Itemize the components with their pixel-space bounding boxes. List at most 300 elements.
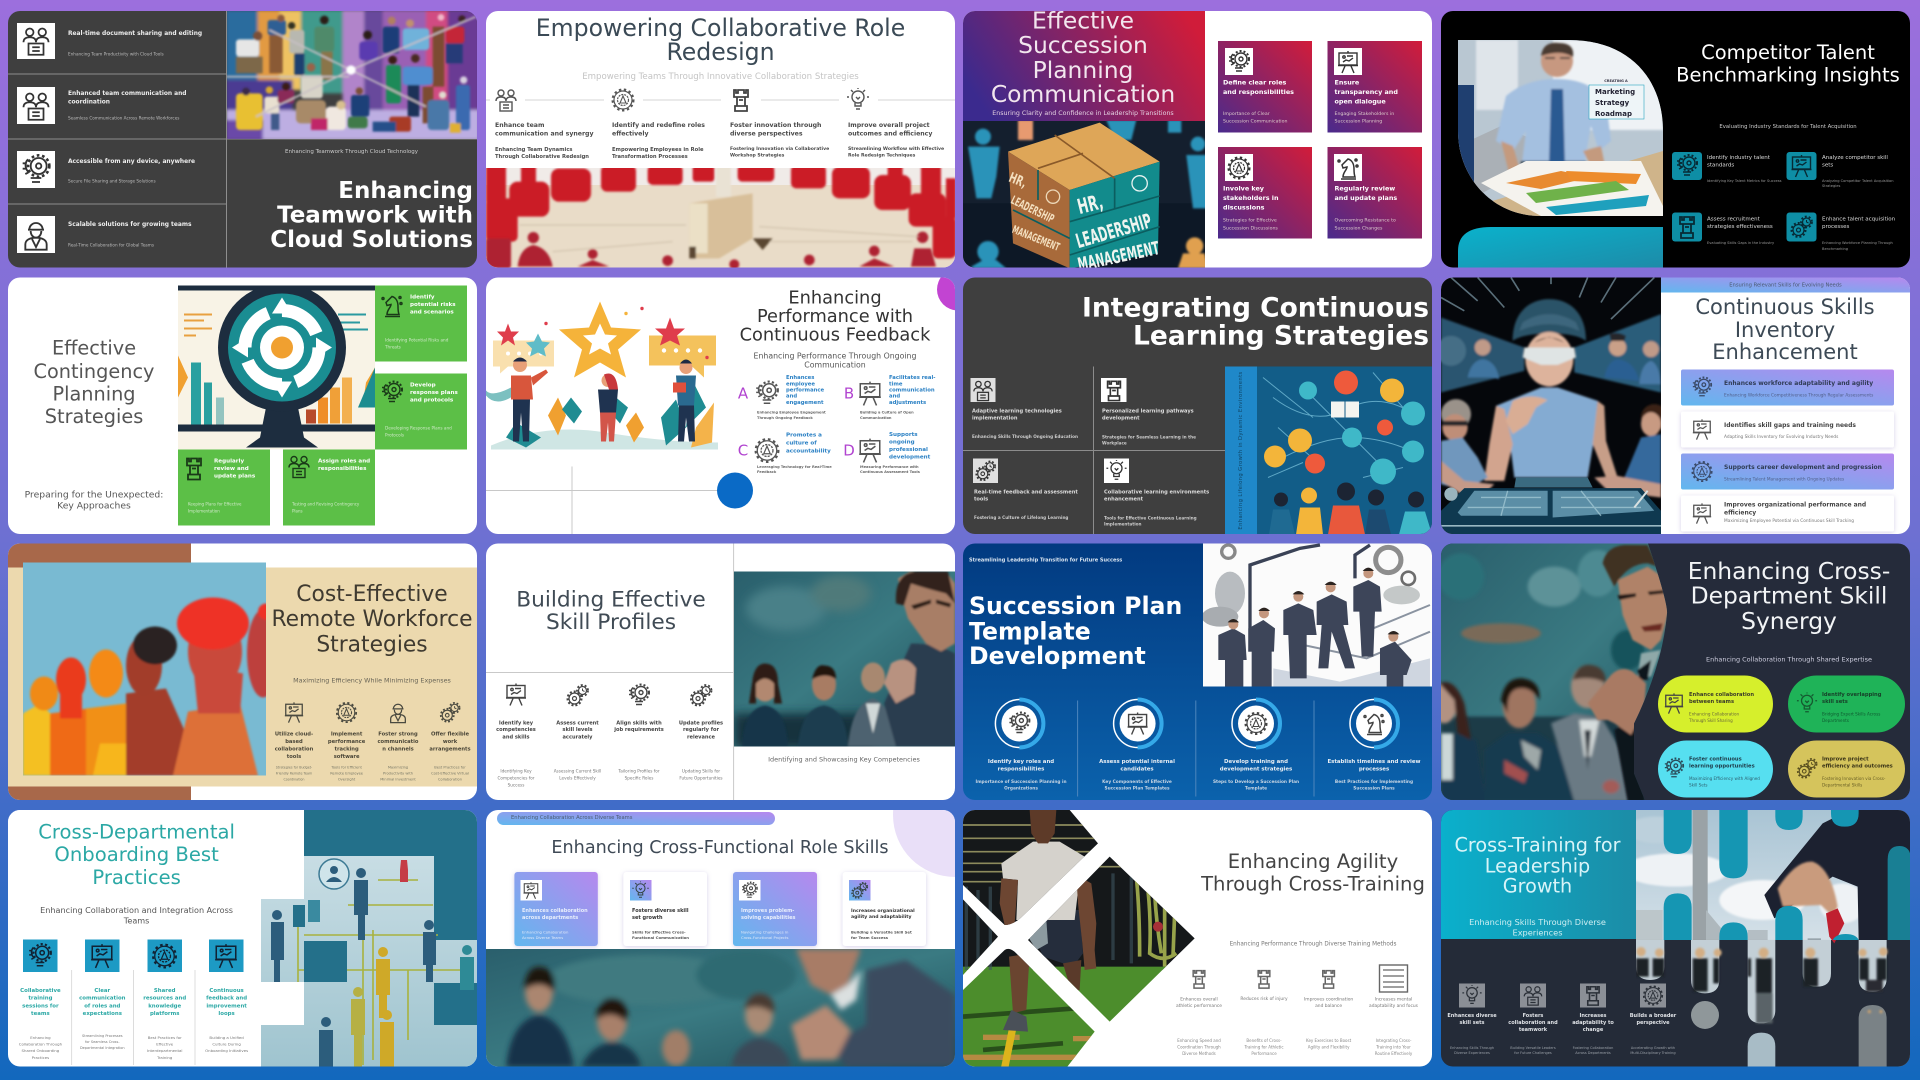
- panel: Effective Succession Planning Communication: [963, 6, 1432, 276]
- callout: assign roles: Testing and Revising Contingency: [291, 501, 360, 506]
- item: identify standards: Identifying Key Talent Metrics for Success: [1707, 179, 1782, 183]
- text column 3: Fostering Innovation via Collaborative: [730, 146, 829, 152]
- title: Onboarding Best: [54, 842, 219, 866]
- white title backing: [8, 810, 304, 856]
- column: align skills: Align skills with: [616, 720, 662, 726]
- title: Succession Plan: [969, 592, 1182, 620]
- text block: item 4: Scalable solutions for growing teams: [68, 222, 192, 228]
- item D: [843, 432, 931, 474]
- text column 4: outcomes and efficiency: [848, 130, 932, 137]
- photo: hand moving red figure with pill cut-outs: [1623, 810, 1911, 1068]
- column: training sessions: Enhancing: [30, 1034, 51, 1040]
- card: problem solving: [733, 872, 817, 946]
- icon tile: team communication: [17, 87, 55, 124]
- panel: Effective Contingency Planning Strategies: [8, 278, 477, 534]
- sign: marketing strategy roadmap: CREATING A: [1604, 79, 1628, 83]
- card: enhance collaboration: across departments: [522, 915, 578, 921]
- photo: red pawns around cream cylinder: [486, 165, 956, 269]
- text block: item 2: Seamless Communication Across Remote Workforces: [68, 116, 179, 120]
- text block: item 2: [68, 91, 187, 120]
- step: assess candidates: Succession Plan Templates: [1104, 785, 1170, 791]
- pill: project efficiency: [1788, 740, 1905, 798]
- step: timelines: [1327, 700, 1421, 791]
- column: injury risk: [1240, 971, 1288, 1056]
- column: cloud collaboration: Utilize cloud-: [275, 732, 313, 738]
- column: shared resources: Effective: [156, 1041, 174, 1046]
- column: performance tracking: software: [334, 754, 360, 760]
- column: coordination: [1304, 971, 1353, 1049]
- column: shared resources: platforms: [150, 1011, 179, 1017]
- item A: Enhancing Employee Engagement: [757, 410, 826, 414]
- text block: item 1: [68, 31, 202, 56]
- cube lettering: MANAGEMENT: [1076, 237, 1162, 276]
- subtitle: Enhancing Performance Through Ongoing: [754, 351, 917, 360]
- column: broader perspective: Multi-Disciplinary Training: [1630, 1051, 1676, 1055]
- text column 2: Identify and redefine roles: [612, 122, 705, 128]
- title: Redesign: [666, 38, 775, 66]
- callout: response plans: Developing Response Plans and: [385, 425, 452, 430]
- item A: [738, 375, 826, 420]
- pill: project efficiency: Improve project: [1822, 756, 1869, 762]
- callout: identify risks: Identifying Potential Risks and: [385, 337, 449, 342]
- column: identify competencies: competencies: [496, 727, 536, 733]
- photo: blurred businessman pointing: [486, 949, 955, 1067]
- text column 1: [495, 122, 593, 160]
- column: identify competencies: [496, 684, 536, 787]
- title: Cross-Training for: [1455, 833, 1621, 856]
- column: flexible work: [429, 703, 471, 782]
- column: shared resources: [143, 940, 186, 1060]
- card: enhance collaboration: [514, 872, 598, 946]
- text column 2: Empowering Employees in Role: [612, 147, 704, 153]
- column: training sessions: Practices: [32, 1054, 49, 1060]
- item card: ensure transparency: Engaging Stakeholders in: [1334, 110, 1394, 116]
- vertical strip label: Enhancing Lifelong Growth in Dynamic Environments: [1238, 371, 1244, 530]
- illustration: profile silhouettes in warm colours: [23, 562, 279, 776]
- column: athletic performance: athletic performance: [1176, 1002, 1222, 1008]
- subtitle: Communication: [804, 360, 866, 369]
- column: collaboration: collaboration and: [1508, 1020, 1558, 1026]
- column: cloud collaboration: Friendly Remote Team: [276, 772, 312, 776]
- item: real-time feedback: [973, 458, 1078, 520]
- column: continuous feedback: improvement: [206, 1003, 247, 1009]
- pill: overlapping skills: skill sets: [1822, 699, 1848, 705]
- title: Enhancing: [788, 287, 882, 308]
- text column 4: Streamlining Workflow with Effective: [848, 146, 944, 152]
- card: enhance collaboration: Enhancing Collaboration: [522, 929, 569, 934]
- item card: define clear roles: Succession Communication: [1223, 118, 1287, 124]
- column: clear communication: communication: [79, 995, 126, 1001]
- illustration: target on monitor: [178, 284, 375, 450]
- item A: Enhances: [786, 375, 814, 381]
- callout: response plans: Protocols: [385, 432, 404, 437]
- text column 1: Enhancing Team Dynamics: [495, 147, 572, 153]
- item: collaborative environments: [1104, 458, 1209, 526]
- column: coordination: and balance: [1315, 1002, 1342, 1008]
- step: assess candidates: Assess potential internal: [1099, 759, 1175, 765]
- column: align skills: Specific Roles: [625, 775, 653, 780]
- column: shared resources: knowledge: [148, 1003, 182, 1009]
- column: performance tracking: Oversight: [338, 778, 356, 782]
- column: cloud collaboration: [275, 702, 314, 782]
- column: continuous feedback: [205, 940, 248, 1052]
- item card: review plans: Succession Changes: [1334, 225, 1383, 231]
- card: problem solving: Navigating Challenges in: [741, 929, 789, 934]
- column: cloud collaboration: collaboration: [275, 746, 314, 752]
- column: performance tracking: tracking: [334, 746, 359, 752]
- subtitle: Teams: [123, 916, 149, 926]
- column: athletic performance: Diverse Methods: [1182, 1050, 1216, 1056]
- column: identify competencies: Identifying Key: [500, 768, 532, 773]
- icon tile: document sharing: [17, 23, 55, 59]
- column: identify competencies: Competencies for: [498, 775, 535, 780]
- panel: Competitor Talent Benchmarking Insights: [1441, 11, 1910, 268]
- item C: C: [738, 442, 748, 460]
- callout: assign roles: Assign roles and: [318, 458, 370, 464]
- callout: response plans: response plans: [410, 390, 458, 396]
- sign: marketing strategy roadmap: Marketing: [1595, 88, 1635, 96]
- item B: and: [889, 394, 900, 400]
- item: enhance acquisition: Enhancing Workforce Planning Through: [1822, 241, 1893, 245]
- photo: leadership cube: [963, 120, 1208, 276]
- callout: review plans: update plans: [214, 474, 256, 480]
- item B: communication: [889, 388, 935, 394]
- item D: professional: [889, 447, 928, 453]
- column: adaptability: change: [1583, 1027, 1604, 1033]
- band label: Ensuring Relevant Skills for Evolving Needs: [1729, 282, 1842, 288]
- item B: Communication: [860, 416, 892, 420]
- column: strong communication: Minimal Investment: [380, 778, 416, 782]
- top band: [1661, 278, 1910, 292]
- column: collaboration: Fosters: [1523, 1013, 1543, 1019]
- text block: item 3: [68, 159, 195, 184]
- column: align skills: Tailoring Profiles for: [617, 768, 660, 773]
- pill: continuous learning: [1658, 740, 1773, 798]
- subtitle: Enhancing Performance Through Diverse Training Methods: [1230, 942, 1396, 948]
- row: adaptability: Enhancing Workforce Competitiveness Through Regular Assessments: [1724, 392, 1874, 398]
- illustration: suited team climbing: [1202, 544, 1432, 687]
- text block: item 1: Enhancing Team Productivity with Cloud Tools: [68, 52, 164, 56]
- column: collaboration: teamwork: [1519, 1027, 1548, 1033]
- pill: enhance collaboration: Enhancing Collaboration: [1689, 711, 1739, 716]
- title: Enhancement: [1712, 340, 1858, 364]
- item card: define clear roles: [1218, 41, 1312, 132]
- item card: review plans: [1328, 147, 1422, 238]
- step: identify roles: [975, 700, 1067, 791]
- pill: enhance collaboration: [1658, 676, 1773, 732]
- step: assess candidates: [1099, 700, 1175, 791]
- photo: man at roadmap table: [1458, 40, 1663, 216]
- callout: assign roles: Plans: [292, 508, 303, 513]
- title: Development: [969, 642, 1146, 670]
- icon: outcomes hand: [847, 88, 869, 109]
- panel: Integrating Continuous Learning Strategies: [963, 278, 1432, 534]
- item: identify standards: Identify industry talent: [1707, 155, 1771, 161]
- title: Enhancing: [338, 178, 473, 204]
- card: agility: Increases organizational: [851, 908, 915, 914]
- column: shared resources: Interdepartmental: [147, 1048, 182, 1052]
- panel: Succession Plan Template Development: [963, 544, 1432, 800]
- column: mental adaptability: Increases mental: [1375, 996, 1412, 1002]
- card: problem solving: solving capabilities: [741, 915, 795, 921]
- row: organizational performance: efficiency: [1724, 509, 1756, 516]
- column: continuous feedback: Building a Unified: [209, 1034, 244, 1040]
- icon: role network: [612, 90, 634, 110]
- title: Remote Workforce: [271, 607, 473, 632]
- pill label: Enhancing Collaboration Across Diverse Teams: [511, 815, 633, 821]
- column: continuous feedback: Culture During: [212, 1041, 241, 1046]
- column: coordination: Agility and Flexibility: [1308, 1044, 1350, 1049]
- card: enhance collaboration: Across Diverse Teams: [522, 934, 563, 940]
- item C: Leveraging Technology for Real-Time: [757, 465, 832, 469]
- callout: review plans: Implementation: [188, 508, 220, 513]
- title band: [1441, 810, 1637, 939]
- icon: crane: [734, 90, 748, 111]
- text block: item 3: Secure File Sharing and Storage Solutions: [68, 178, 156, 184]
- title: Integrating Continuous: [1082, 292, 1429, 323]
- item C: accountability: [786, 448, 831, 454]
- item: assess recruitment: Evaluating Skills Gaps in the Industry: [1707, 241, 1775, 245]
- item card: ensure transparency: Succession Planning: [1334, 118, 1382, 124]
- item card: review plans: Regularly review: [1334, 184, 1395, 192]
- text block: item 1: Real-time document sharing and editing: [68, 31, 202, 37]
- text column 3: Foster innovation through: [730, 122, 821, 128]
- cube lettering: HR,: [1007, 169, 1029, 191]
- column: cloud collaboration: Coordination: [283, 778, 305, 782]
- panel: Enhancing Performance with Continuous Feedback: [486, 268, 979, 534]
- text block: item 3: Accessible from any device, anywhere: [68, 159, 195, 165]
- subtitle: Experiences: [1513, 928, 1562, 938]
- row: organizational performance: Maximizing Employee Potential via Continuous Skill Tracking: [1724, 518, 1854, 524]
- item D: ongoing: [889, 440, 915, 446]
- column: clear communication: of roles and: [84, 1003, 121, 1009]
- text block: item 2: Enhanced team communication and: [68, 91, 187, 97]
- step: identify roles: Organizations: [1004, 785, 1038, 791]
- illustration: people network: [261, 810, 477, 1067]
- text column 4: Improve overall project: [848, 122, 930, 128]
- item: personalized pathways: Strategies for Seamless Learning in the: [1102, 434, 1196, 439]
- item: real-time feedback: Real-time feedback and assessment: [974, 490, 1078, 496]
- column: cloud collaboration: based: [285, 739, 303, 745]
- column: coordination: Improves coordination: [1304, 996, 1353, 1002]
- row: adaptability: [1681, 370, 1894, 406]
- step: timelines: processes: [1359, 766, 1389, 772]
- text column 3: [730, 122, 829, 158]
- title: Practices: [92, 865, 181, 888]
- column: performance tracking: Tools for Efficient: [330, 766, 363, 770]
- column: flexible work: Offer flexible: [431, 732, 469, 738]
- callout: assign roles: responsibilities: [318, 466, 367, 472]
- item D: Continuous Assessment Tools: [860, 470, 920, 474]
- callout: identify risks: Identify: [410, 294, 435, 300]
- title: Strategies: [45, 404, 143, 428]
- column: strong communication: Maximizing: [388, 766, 408, 770]
- column: mental adaptability: Training into Your: [1375, 1044, 1411, 1049]
- item card: review plans: and update plans: [1334, 194, 1397, 202]
- title: Continuous Skills: [1695, 295, 1875, 319]
- subtitle: Enhancing Skills Through Diverse: [1469, 917, 1606, 927]
- row: skill gaps: Identifies skill gaps and training needs: [1724, 422, 1856, 429]
- pill: overlapping skills: Departments: [1822, 718, 1849, 723]
- column: broader perspective: perspective: [1636, 1020, 1670, 1026]
- item: personalized pathways: [1101, 378, 1196, 445]
- column: update profiles: [679, 685, 723, 780]
- column: injury risk: Benefits of Cross-: [1246, 1038, 1282, 1042]
- card: enhance collaboration: Enhances collaboration: [522, 908, 588, 914]
- corner accent: [893, 753, 1017, 877]
- pill: project efficiency: Fostering Innovation via Cross-: [1822, 776, 1886, 780]
- column: adaptability: Increases: [1580, 1013, 1606, 1019]
- column: diverse skills: Diverse Experiences: [1454, 1051, 1490, 1055]
- text column 3: Workshop Strategies: [730, 152, 785, 158]
- column: strong communication: Productivity with: [383, 772, 413, 776]
- item D: development: [889, 454, 931, 460]
- card: problem solving: Cross-Functional Projects: [741, 934, 789, 940]
- card: agility: agility and adaptability: [851, 914, 911, 920]
- column: strong communication: n channels: [382, 746, 414, 752]
- step: develop strategies: Template: [1245, 785, 1267, 791]
- card: agility: Building a Versatile Skill Set: [851, 929, 912, 934]
- column: assess skill levels: skill levels: [562, 727, 593, 733]
- column: diverse skills: Enhancing Skills Through: [1450, 1046, 1494, 1050]
- title: Growth: [1503, 874, 1572, 897]
- title: Skill Profiles: [546, 610, 676, 634]
- card: agility: [843, 872, 926, 946]
- panel: Enhancing Agility Through Cross-Training: [963, 810, 1432, 1068]
- item: enhance acquisition: [1786, 212, 1896, 251]
- card: skill growth: Fosters diverse skill: [632, 908, 689, 914]
- panel: Empowering Collaborative Role Redesign: [486, 11, 956, 269]
- title: Synergy: [1741, 607, 1837, 635]
- column: clear communication: Streamlining Processes: [82, 1034, 123, 1038]
- panel: Enhancing Cross-Functional Role Skills: [486, 753, 1017, 1067]
- card: skill growth: set growth: [632, 915, 663, 921]
- callout: identify risks: Threats: [384, 344, 401, 349]
- panel: Cost-Effective Remote Workforce Strategies: [8, 544, 477, 800]
- item A: engagement: [786, 400, 824, 406]
- card: skill growth: Skills for Effective Cross-: [632, 929, 686, 934]
- column: assess skill levels: [554, 685, 601, 780]
- photo: woman with visor and holographic table: [1436, 278, 1668, 536]
- sign: marketing strategy roadmap: Strategy: [1595, 99, 1630, 107]
- item C: [738, 432, 832, 474]
- card: problem solving: Improves problem-: [741, 908, 794, 914]
- panel: Cross-Training for Leadership Growth: [1441, 810, 1911, 1068]
- text block: item 4: Real-Time Collaboration for Global Teams: [68, 242, 154, 248]
- column: flexible work: work: [443, 739, 458, 745]
- column: clear communication: Clear: [94, 988, 111, 994]
- column: athletic performance: Enhances overall: [1180, 996, 1218, 1002]
- column: mental adaptability: [1369, 965, 1419, 1056]
- item: collaborative environments: Implementation: [1104, 521, 1142, 526]
- title: Competitor Talent: [1701, 40, 1875, 64]
- pill: overlapping skills: [1788, 676, 1905, 732]
- panel: Continuous Skills Inventory Enhancement: [1436, 278, 1910, 536]
- item: personalized pathways: development: [1102, 416, 1140, 422]
- item B: adjustments: [889, 400, 926, 406]
- icon tile: scalable teams: [17, 216, 55, 253]
- item card: involve stakeholders: stakeholders in: [1223, 194, 1279, 202]
- title: Cost-Effective: [296, 582, 448, 606]
- subtitle: Key Approaches: [57, 500, 131, 511]
- item: adaptive learning: implementation: [972, 416, 1018, 422]
- item card: ensure transparency: Ensure: [1334, 78, 1360, 86]
- column: align skills: job requirements: [613, 727, 664, 733]
- item: analyze skill sets: Strategies: [1822, 184, 1840, 188]
- item card: involve stakeholders: discussions: [1223, 204, 1265, 212]
- item D: Supports: [889, 432, 918, 438]
- step: timelines: Establish timelines and review: [1327, 759, 1421, 765]
- item B: [844, 375, 936, 420]
- column: athletic performance: [1176, 971, 1222, 1056]
- item A: performance: [786, 388, 825, 394]
- column: adaptability: Across Departments: [1575, 1051, 1611, 1055]
- column: continuous feedback: Onboarding Initiatives: [205, 1048, 248, 1052]
- panel: Cross-Departmental Onboarding Best Practices: [8, 810, 477, 1067]
- callout: review plans: Regularly: [214, 458, 244, 464]
- subtitle: Ensuring Clarity and Confidence in Leadership Transitions: [992, 110, 1174, 117]
- item A: employee: [786, 382, 815, 388]
- item C: Feedback: [757, 470, 777, 474]
- item A: and: [786, 394, 797, 400]
- row: organizational performance: Improves organizational performance and: [1724, 501, 1866, 508]
- column: update profiles: relevance: [687, 734, 716, 740]
- column: clear communication: expectations: [83, 1011, 122, 1017]
- title: Building Effective: [516, 587, 706, 612]
- title: Through Cross-Training: [1200, 872, 1425, 895]
- column: identify competencies: Identify key: [499, 720, 534, 726]
- illustration: lifelong learning network: [1225, 366, 1432, 534]
- column: update profiles: Updating Skills for: [682, 768, 720, 773]
- column: injury risk: Performance: [1251, 1050, 1277, 1056]
- title: Planning: [1033, 56, 1133, 84]
- cube lettering: LEADERSHIP: [1008, 194, 1056, 226]
- step: develop strategies: Develop training and: [1224, 759, 1288, 765]
- panel: Enhancing Cross-Department Skill Synergy: [1432, 543, 1910, 802]
- card: skill growth: Functional Communication: [632, 934, 689, 940]
- item: adaptive learning: [970, 378, 1078, 439]
- card: agility: for Team Success: [851, 934, 889, 940]
- eyebrow: Streamlining Leadership Transition for Future Success: [969, 558, 1122, 564]
- callout: identify risks: [375, 286, 467, 362]
- callout: identify risks: and scenarios: [410, 310, 454, 316]
- column: shared resources: resources and: [143, 995, 186, 1001]
- pill: overlapping skills: Bridging Expert Skills Across: [1822, 711, 1880, 716]
- column: flexible work: Collaboration: [438, 778, 462, 782]
- column: assess skill levels: Assess current: [556, 720, 599, 726]
- subtitle: Enhancing Collaboration Through Shared Expertise: [1706, 656, 1872, 664]
- pill: continuous learning: Skill Sets: [1689, 782, 1708, 787]
- corner accent: [937, 268, 979, 310]
- column: assess skill levels: Assessing Current Skill: [554, 768, 601, 773]
- column: clear communication: [79, 940, 126, 1050]
- title: Learning Strategies: [1133, 320, 1429, 351]
- cube lettering: LEADERSHIP: [1073, 209, 1154, 253]
- title: Cross-Departmental: [38, 820, 235, 843]
- column: identify competencies: Success: [508, 782, 524, 787]
- title: Effective: [52, 336, 136, 359]
- illustration: team with ladders and ropes: [226, 10, 479, 140]
- column: update profiles: Future Opportunities: [679, 775, 723, 780]
- step: develop strategies: development strategies: [1220, 766, 1292, 772]
- column: adaptability: Fostering Collaboration: [1573, 1046, 1613, 1050]
- column: continuous feedback: Continuous: [209, 988, 244, 994]
- column: assess skill levels: Levels Effectively: [559, 775, 596, 780]
- column: strong communication: communicatio: [377, 739, 419, 745]
- cube lettering: [1007, 169, 1162, 276]
- column: clear communication: Departmental Integration: [80, 1046, 125, 1050]
- column: clear communication: for Seamless Cross-: [85, 1040, 120, 1044]
